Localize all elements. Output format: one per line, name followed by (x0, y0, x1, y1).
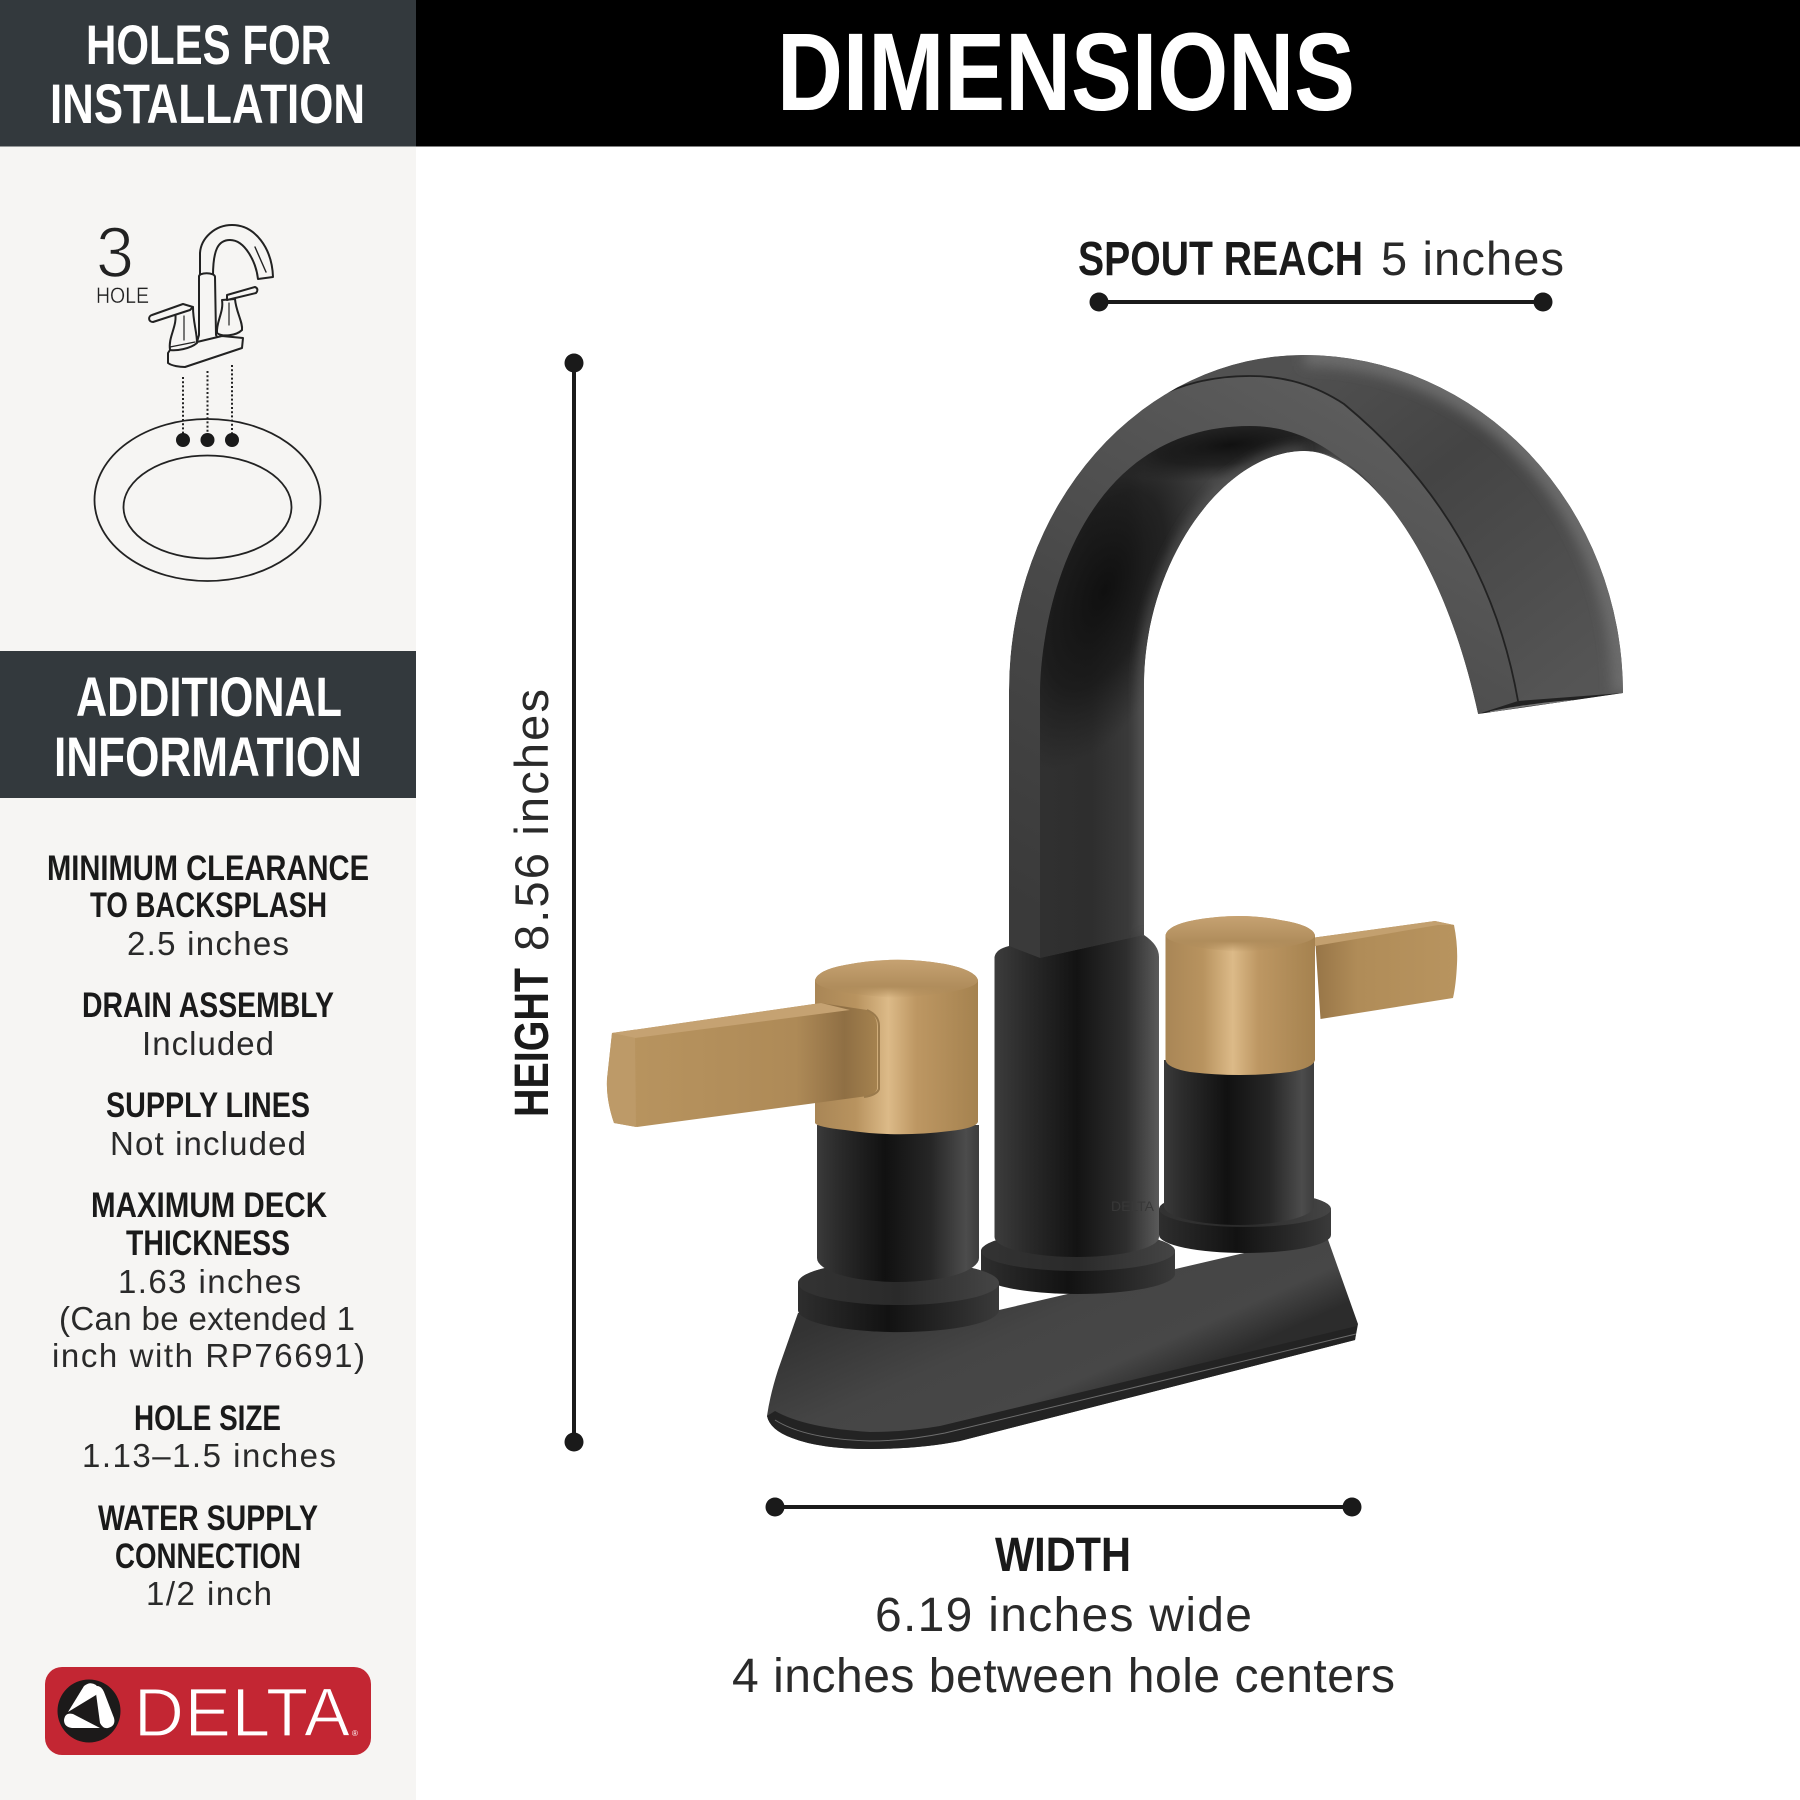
text block: drain assembly: DRAIN ASSEMBLY (82, 986, 334, 1025)
dimension: height label (505, 689, 559, 1117)
arrow: width line (766, 1498, 1362, 1516)
icon: dotted hole guides (183, 365, 232, 440)
panel: holes for installation header: HOLES FOR (86, 13, 331, 76)
panel: holes for installation header: INSTALLATION (50, 72, 365, 135)
arrow: spout reach line (1090, 292, 1552, 312)
dimension: width text: WIDTH (995, 1529, 1131, 1582)
text block: water supply connection (98, 1499, 318, 1612)
dimension: spout reach label: SPOUT REACH (1078, 233, 1363, 286)
icon: three hole count label (96, 214, 149, 308)
text block: maximum deck thickness: THICKNESS (126, 1224, 290, 1263)
dimension: height label: HEIGHT (506, 968, 559, 1117)
panel: holes for installation header (0, 0, 416, 146)
logo: delta: DELTA (134, 1674, 350, 1751)
text block: hole size: 1.13–1.5 inches (82, 1437, 336, 1474)
faucet: right handle base ring (1159, 1191, 1331, 1253)
text block: minimum clearance: 2.5 inches (127, 925, 289, 962)
faucet: spout (950, 355, 1623, 958)
panel: additional information header (0, 651, 416, 798)
text block: supply lines (106, 1086, 310, 1162)
text block: minimum clearance: TO BACKSPLASH (90, 886, 327, 925)
text block: supply lines: SUPPLY LINES (106, 1086, 310, 1125)
dimension: spout reach value: 5 inches (1381, 232, 1564, 285)
dimension: width text: 4 inches between hole centers (732, 1650, 1395, 1703)
text block: water supply connection: CONNECTION (115, 1537, 301, 1576)
panel: additional information header: INFORMATION (54, 725, 362, 788)
panel: additional information header: ADDITIONAL (76, 665, 342, 728)
title bar: dimensions (416, 0, 1800, 146)
panel: left sidebar (0, 0, 416, 1800)
faucet: right lever (1315, 921, 1457, 1019)
logo: delta (45, 1667, 371, 1755)
text block: maximum deck thickness: 1.63 inches (118, 1263, 301, 1300)
logo: delta: ® (352, 1729, 358, 1738)
dimension: width text: 6.19 inches wide (875, 1589, 1252, 1642)
faucet: deck plate (767, 1234, 1358, 1449)
faucet: center base ring (981, 1231, 1175, 1294)
text block: maximum deck thickness: MAXIMUM DECK (91, 1186, 327, 1225)
faucet: right handle column (1164, 1060, 1314, 1225)
icon: sink basin with holes (94, 419, 320, 581)
text block: hole size (82, 1399, 336, 1474)
text block: water supply connection: WATER SUPPLY (98, 1499, 318, 1538)
text block: maximum deck thickness: (Can be extended 1 (59, 1300, 355, 1337)
faucet: left handle cap (815, 960, 978, 1134)
dimension: height label: 8.56 inches (505, 689, 558, 951)
faucet: left handle base ring (798, 1261, 999, 1332)
text block: maximum deck thickness: inch with RP76691) (52, 1337, 365, 1374)
arrow: height line (564, 354, 584, 1452)
text block: minimum clearance (47, 849, 369, 962)
dimension: width text (732, 1529, 1395, 1703)
faucet: center body column (994, 935, 1159, 1257)
faucet: right handle cap (1166, 916, 1315, 1075)
text block: hole size: HOLE SIZE (134, 1399, 281, 1438)
text block: drain assembly: Included (142, 1025, 274, 1062)
text block: drain assembly (82, 986, 334, 1062)
text block: maximum deck thickness (52, 1186, 365, 1374)
text block: supply lines: Not included (110, 1125, 306, 1162)
icon: faucet line drawing (149, 225, 273, 367)
text block: water supply connection: 1/2 inch (146, 1575, 272, 1612)
icon: three hole count label: HOLE (96, 283, 149, 308)
faucet: faint logo mark: DELTA (1111, 1198, 1155, 1214)
text block: minimum clearance: MINIMUM CLEARANCE (47, 849, 369, 888)
icon: three hole count label: 3 (96, 214, 134, 293)
faucet: left lever (607, 1003, 879, 1127)
faucet: left handle column (817, 1125, 979, 1282)
faucet product image (607, 355, 1623, 1449)
title bar: dimensions: DIMENSIONS (777, 11, 1355, 134)
